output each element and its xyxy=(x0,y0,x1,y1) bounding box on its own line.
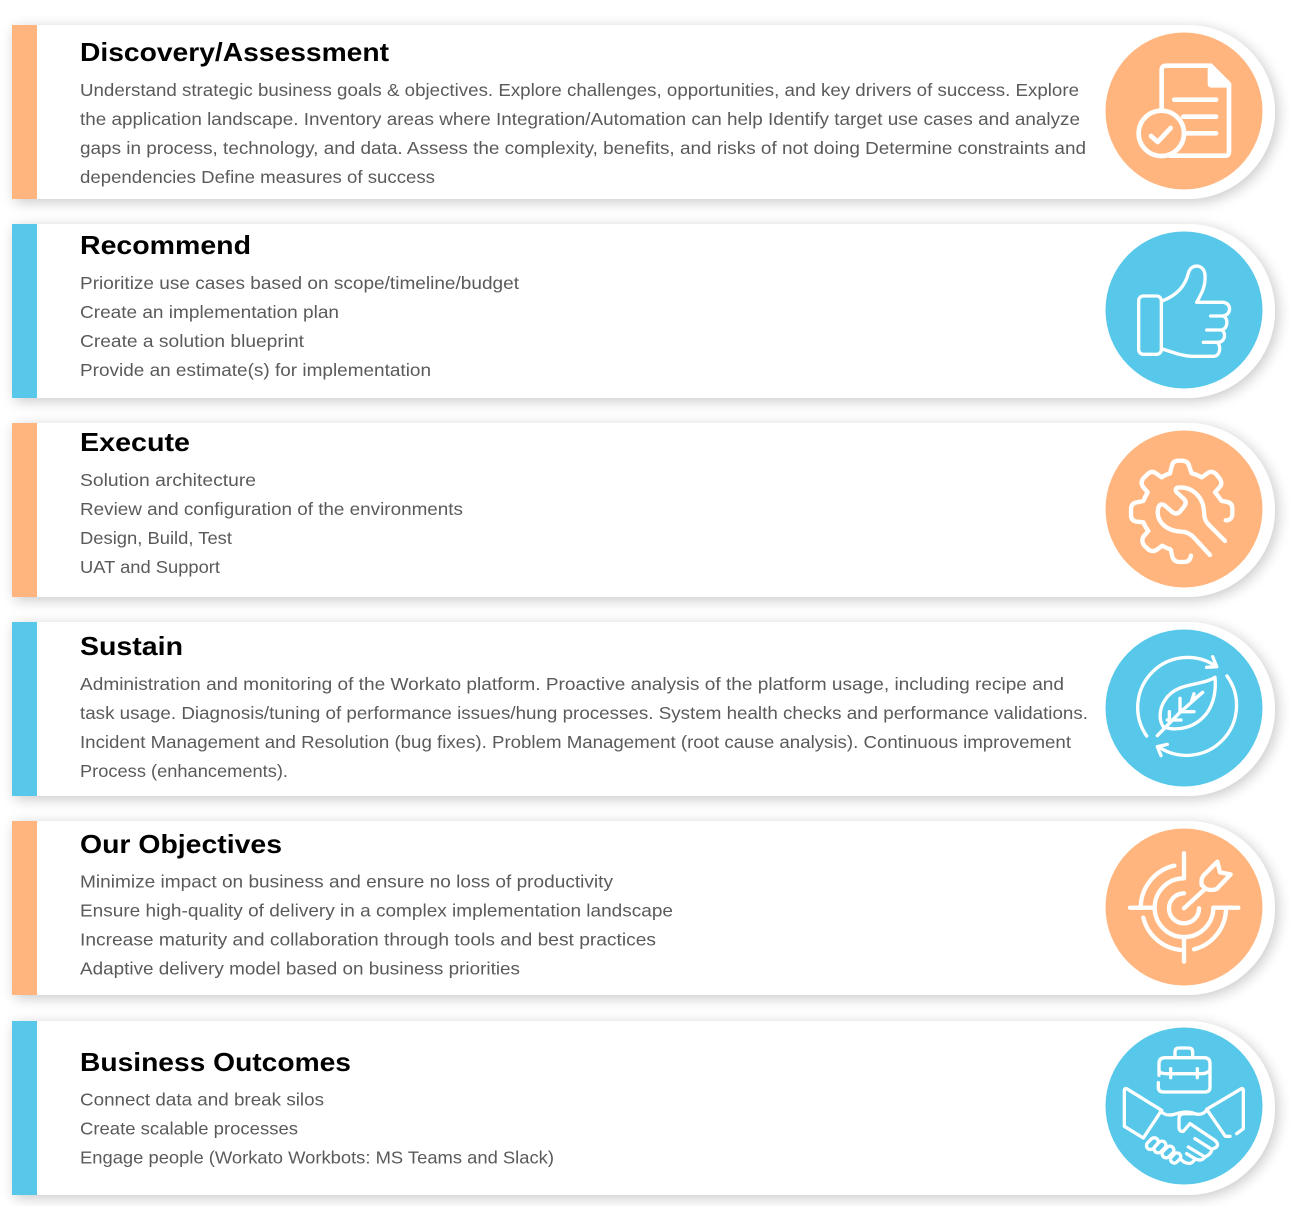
text block: sustain description: task usage. Diagnosis/tuning of performance issues/hung processes. System health checks and performance validations. xyxy=(80,703,1088,723)
panel: Recommend xyxy=(12,224,1275,398)
text block: discovery description: the application landscape. Inventory areas where Integration/Automation can help Identify target use cases and analyze xyxy=(80,109,1080,129)
text block: objectives list xyxy=(80,872,673,978)
text block: discovery description: gaps in process, technology, and data. Assess the complexity, benefits, and risks of not doing Determine constraints and xyxy=(80,138,1086,158)
text block: execute list: Solution architecture xyxy=(80,470,256,490)
heading: Execute: Execute xyxy=(80,427,190,457)
text block: objectives list: Minimize impact on business and ensure no loss of productivity xyxy=(80,872,613,892)
icon: gear and wrench xyxy=(1106,430,1262,588)
text block: discovery description xyxy=(80,80,1086,187)
icon: handshake and briefcase xyxy=(1106,1028,1262,1184)
text block: outcomes list: Engage people (Workato Workbots: MS Teams and Slack) xyxy=(80,1148,554,1168)
text block: execute list xyxy=(80,470,463,577)
text block: sustain description: Process (enhancements). xyxy=(80,761,288,781)
heading: Discovery/Assessment: Discovery/Assessment xyxy=(80,37,389,67)
heading: Sustain: Sustain xyxy=(80,631,183,661)
text block: outcomes list: Create scalable processes xyxy=(80,1118,298,1138)
text block: sustain description: Administration and monitoring of the Workato platform. Proactive analysis of the platform usage, including recipe and xyxy=(80,674,1064,694)
text block: sustain description: Incident Management and Resolution (bug fixes). Problem Management (root cause analysis). Continuous improvement xyxy=(80,732,1071,752)
icon: leaf with recycling arrows xyxy=(1106,630,1262,786)
text block: recommend list: Create a solution blueprint xyxy=(80,331,304,351)
text block: outcomes list xyxy=(80,1090,554,1168)
panel: Discovery/Assessment xyxy=(12,25,1275,199)
text block: objectives list: Ensure high-quality of delivery in a complex implementation landscape xyxy=(80,900,673,920)
text block: recommend list: Create an implementation plan xyxy=(80,302,339,322)
panel: Our Objectives xyxy=(12,821,1275,995)
icon: document with check mark xyxy=(1106,32,1262,190)
text block: sustain description xyxy=(80,674,1088,781)
text block: execute list: Review and configuration of the environments xyxy=(80,499,463,519)
text block: recommend list xyxy=(80,273,519,380)
text block: discovery description: Understand strategic business goals & objectives. Explore challenges, opportunities, and key drivers of success. Explore xyxy=(80,80,1079,100)
icon: thumbs up xyxy=(1106,232,1262,388)
panel: Business Outcomes xyxy=(12,1021,1275,1195)
text block: outcomes list: Connect data and break silos xyxy=(80,1090,324,1110)
text block: objectives list: Increase maturity and collaboration through tools and best practices xyxy=(80,930,656,950)
text block: execute list: Design, Build, Test xyxy=(80,528,232,548)
text block: discovery description: dependencies Define measures of success xyxy=(80,167,435,187)
text block: objectives list: Adaptive delivery model based on business priorities xyxy=(80,958,520,978)
panel: Sustain xyxy=(12,622,1275,796)
text block: execute list: UAT and Support xyxy=(80,557,220,577)
panel: Execute xyxy=(12,423,1275,597)
heading: Our Objectives: Our Objectives xyxy=(80,829,282,859)
heading: Business Outcomes: Business Outcomes xyxy=(80,1047,351,1077)
icon: target with arrow xyxy=(1106,828,1262,986)
text block: recommend list: Provide an estimate(s) for implementation xyxy=(80,360,431,380)
text block: recommend list: Prioritize use cases based on scope/timeline/budget xyxy=(80,273,519,293)
heading: Recommend: Recommend xyxy=(80,230,251,260)
